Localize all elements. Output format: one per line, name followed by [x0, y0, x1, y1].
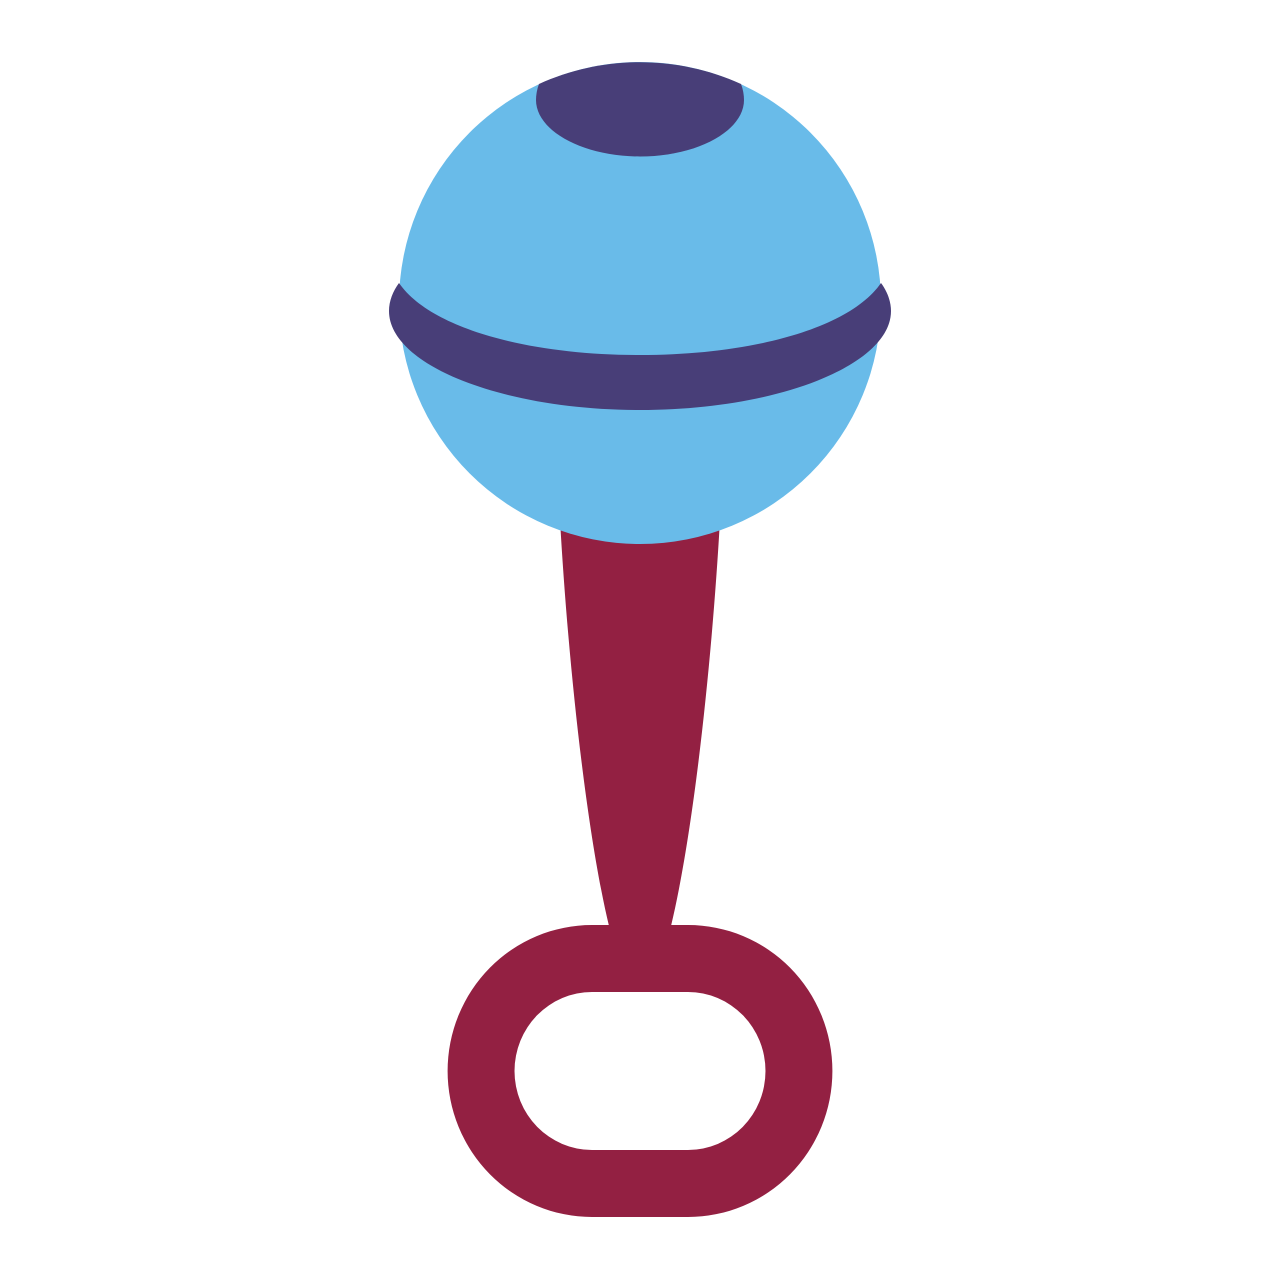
middle band: [389, 283, 891, 410]
rattle handle ring: [448, 925, 832, 1217]
rattle ball: [399, 62, 881, 544]
rattle handle stem: [560, 520, 720, 950]
top cap: [536, 62, 744, 156]
